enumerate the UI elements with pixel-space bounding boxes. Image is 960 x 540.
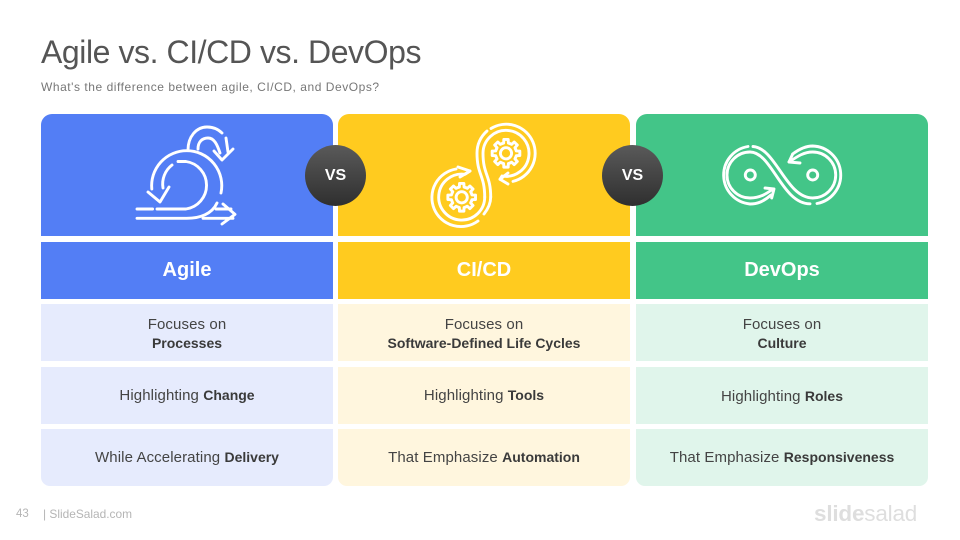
- heading: Agile: [41, 242, 333, 299]
- text block: DevOps highlight: Highlighting Roles: [721, 388, 843, 404]
- text block: CI/CD highlight: Highlighting Tools: [424, 387, 544, 404]
- logo: slidesalad: slidesalad: [814, 501, 917, 526]
- text block: CI/CD focus: Software-Defined Life Cycles: [388, 335, 580, 351]
- text block: Agile focus: Processes: [152, 335, 222, 351]
- panel: agile icon header: [41, 114, 333, 236]
- text block: DevOps focus: Culture: [758, 335, 806, 351]
- text block: CI/CD focus: [338, 304, 630, 361]
- text block: CI/CD automation: [338, 429, 630, 486]
- icon: DevOps infinity loop: [724, 146, 841, 204]
- text block: DevOps highlight: [636, 367, 928, 424]
- heading: DevOps: [636, 242, 928, 299]
- text block: Agile focus: [41, 304, 333, 361]
- VS badge 1: VS: [325, 167, 346, 184]
- text block: Agile highlight: [41, 367, 333, 424]
- text block: Agile highlight: Highlighting Change: [119, 387, 255, 404]
- panel: CI/CD icon header: [338, 114, 630, 236]
- icon: agile sprint loop: [137, 127, 235, 224]
- text block: Agile focus: Focuses on: [148, 316, 226, 333]
- VS badge 1: [305, 144, 366, 206]
- text block: DevOps focus: [636, 304, 928, 361]
- footer source: | SlideSalad.com: [43, 506, 132, 520]
- text block: DevOps responsiveness: That Emphasize Responsiveness: [670, 449, 894, 466]
- text block: Agile delivery: [41, 429, 333, 486]
- page number: 43: [16, 508, 29, 520]
- heading: DevOps: DevOps: [744, 259, 820, 281]
- text block: CI/CD automation: That Emphasize Automation: [388, 449, 580, 466]
- VS badge 2: VS: [622, 167, 643, 184]
- text block: Agile delivery: While Accelerating Delivery: [95, 449, 279, 466]
- panel: DevOps icon header: [636, 114, 928, 236]
- title: Agile vs. CI/CD vs. DevOps: [41, 34, 421, 70]
- text block: CI/CD highlight: [338, 367, 630, 424]
- text block: DevOps focus: Focuses on: [743, 316, 821, 333]
- heading: Agile: Agile: [163, 259, 211, 281]
- heading: CI/CD: [338, 242, 630, 299]
- icon: CI/CD gears loop: [432, 124, 535, 227]
- text block: DevOps responsiveness: [636, 429, 928, 486]
- VS badge 2: [602, 144, 663, 206]
- heading: CI/CD: CI/CD: [457, 259, 511, 281]
- subtitle: What's the difference between agile, CI/CD, and DevOps?: [41, 80, 380, 94]
- text block: CI/CD focus: Focuses on: [445, 316, 523, 333]
